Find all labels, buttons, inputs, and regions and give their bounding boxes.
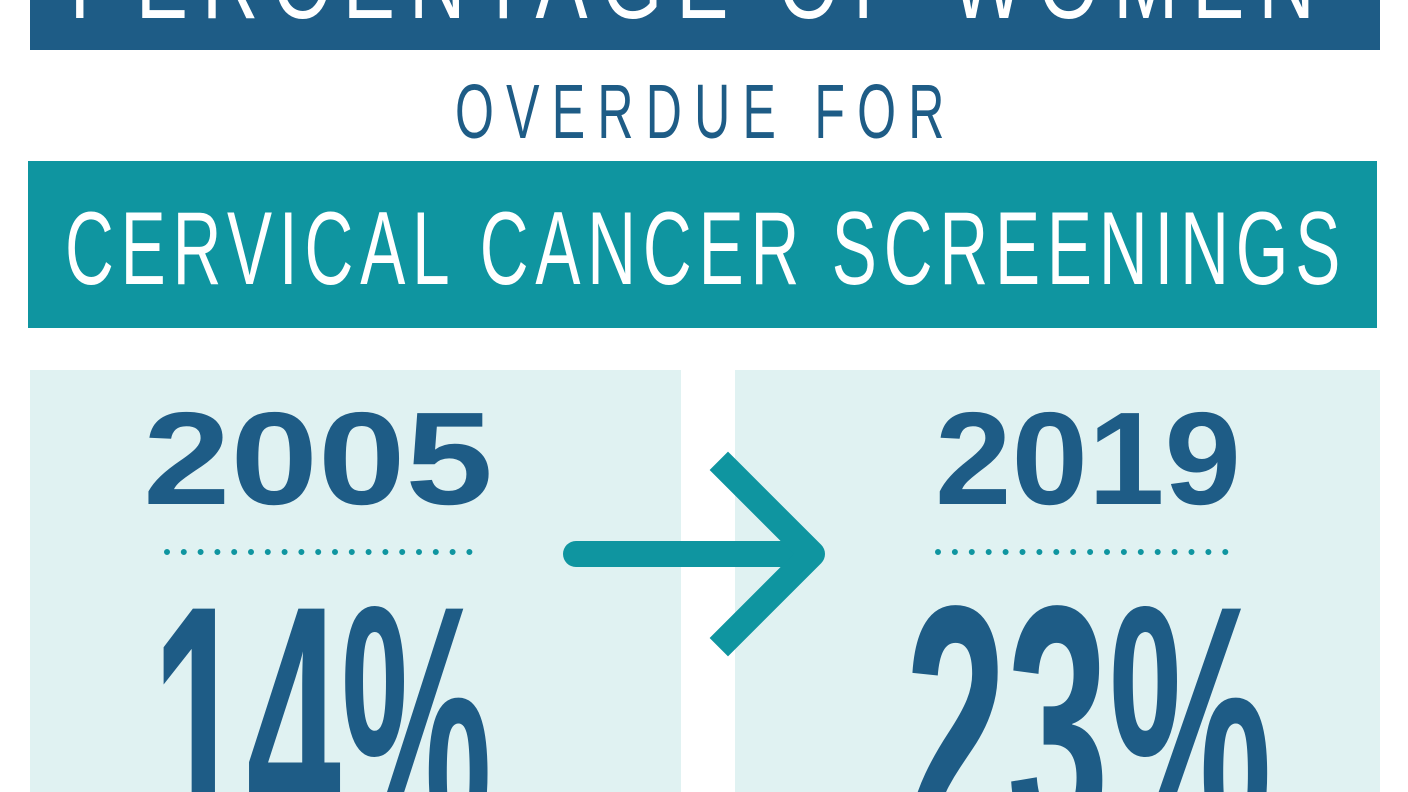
- panel: 2005: [30, 370, 681, 792]
- dotted divider: [167, 549, 470, 555]
- dotted divider: [938, 549, 1242, 555]
- year 2019: 2019: [935, 385, 1241, 532]
- arrow: [576, 470, 812, 638]
- year 2005: 2005: [143, 385, 493, 532]
- title bar: cervical cancer screenings: [28, 161, 1377, 328]
- subtitle: overdue for: OVERDUE FOR: [455, 68, 944, 155]
- title bar: cervical cancer screenings: CERVICAL CANCER SCREENINGS: [65, 190, 1340, 307]
- panel: 2019: [735, 370, 1380, 792]
